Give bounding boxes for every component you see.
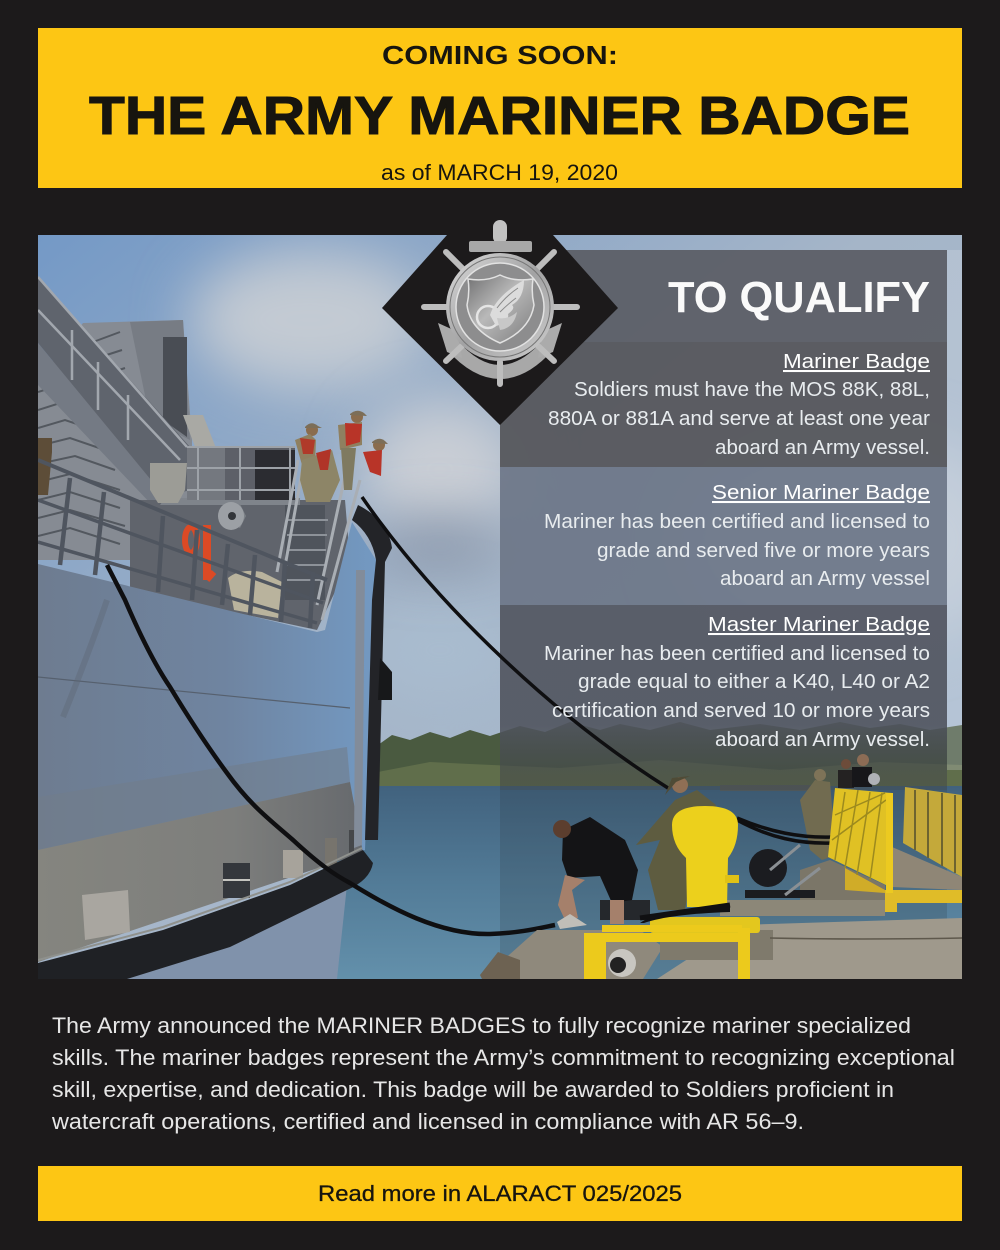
hull mid band — [130, 747, 350, 830]
hull lower band — [38, 782, 363, 962]
title: THE ARMY MARINER BADGE — [89, 86, 910, 146]
dark fender strake — [352, 505, 392, 840]
ship superstructure — [38, 277, 350, 630]
loudspeaker — [218, 502, 246, 530]
heading: to qualify: TO QUALIFY — [668, 273, 930, 322]
soldier handling line — [636, 776, 716, 910]
hull ports — [82, 830, 354, 940]
diagonal stair slab — [38, 343, 165, 505]
header banner — [38, 28, 962, 188]
date line: as of MARCH 19, 2020 — [381, 160, 618, 185]
photo: ship and pier — [38, 235, 1000, 979]
description paragraph: The Army announced the MARINER BADGES to fully recognize mariner specialized — [52, 1013, 911, 1038]
text block: senior mariner badge: Senior Mariner Badge — [712, 481, 930, 504]
text block: mariner badge: Mariner Badge — [783, 350, 930, 373]
far pier — [720, 785, 811, 791]
mooring line to hull — [107, 565, 555, 934]
text block: mariner badge: aboard an Army vessel. — [715, 436, 930, 459]
life ring — [185, 525, 214, 580]
yellow bollard — [640, 806, 760, 933]
description paragraph — [51, 1013, 955, 1134]
footer banner — [38, 1166, 962, 1221]
yellow gangway bridge — [828, 787, 962, 912]
stairway — [277, 453, 360, 620]
diamond badge backdrop — [382, 235, 618, 425]
mid deck wall — [130, 500, 350, 630]
text block: master mariner badge: aboard an Army vessel. — [715, 728, 930, 751]
chevron wall — [38, 332, 125, 544]
kicker: coming soon: COMING SOON: — [382, 40, 618, 70]
icon: mariner badge — [424, 220, 577, 384]
description paragraph: skills. The mariner badges represent the Army’s commitment to recognizing exceptional — [52, 1045, 955, 1070]
tire fender — [745, 845, 820, 898]
sky — [38, 235, 1000, 979]
description paragraph: watercraft operations, certified and licensed in compliance with AR 56–9. — [51, 1109, 804, 1134]
lower hull — [127, 885, 347, 979]
yellow guard rail — [584, 925, 750, 979]
text block: mariner badge — [548, 350, 930, 459]
text block: mariner badge: 880A or 881A and serve at least one year — [548, 407, 930, 430]
text block: master mariner badge — [544, 613, 930, 751]
white stowage bags — [228, 571, 282, 618]
anchor — [438, 220, 562, 372]
wheel rim — [446, 253, 554, 361]
text block: master mariner badge: certification and served 10 or more years — [552, 699, 930, 722]
man in black bending — [553, 817, 638, 929]
text block: senior mariner badge: grade and served five or more years — [597, 539, 930, 562]
text block: mariner badge: Soldiers must have the MOS 88K, 88L, — [574, 378, 930, 401]
translucent qualify panel — [500, 250, 962, 979]
ship hull — [38, 522, 376, 962]
text block: master mariner badge: grade equal to either a K40, L40 or A2 — [578, 670, 930, 693]
people on pier — [800, 754, 880, 860]
text block: master mariner badge: Master Mariner Badge — [708, 613, 930, 636]
deck equipment — [187, 447, 295, 500]
floodlight — [150, 463, 187, 503]
treeline — [378, 722, 962, 790]
description paragraph: skill, expertise, and dedication. This badge will be awarded to Soldiers proficient in — [52, 1077, 894, 1102]
pier — [480, 860, 962, 979]
text block: master mariner badge: Mariner has been certified and licensed to — [544, 642, 930, 665]
text block: senior mariner badge — [544, 481, 930, 590]
rubber bumper — [38, 850, 373, 979]
footer banner: Read more in ALARACT 025/2025 — [318, 1181, 682, 1206]
text block: senior mariner badge: Mariner has been certified and licensed to — [544, 510, 930, 533]
text block: senior mariner badge: aboard an Army vessel — [720, 567, 930, 590]
front railing — [38, 460, 327, 628]
shield with winged wheel — [467, 275, 534, 343]
second mooring line — [362, 497, 832, 843]
soldiers on deck — [38, 411, 388, 502]
wheel spokes — [424, 252, 577, 384]
water — [335, 786, 962, 979]
